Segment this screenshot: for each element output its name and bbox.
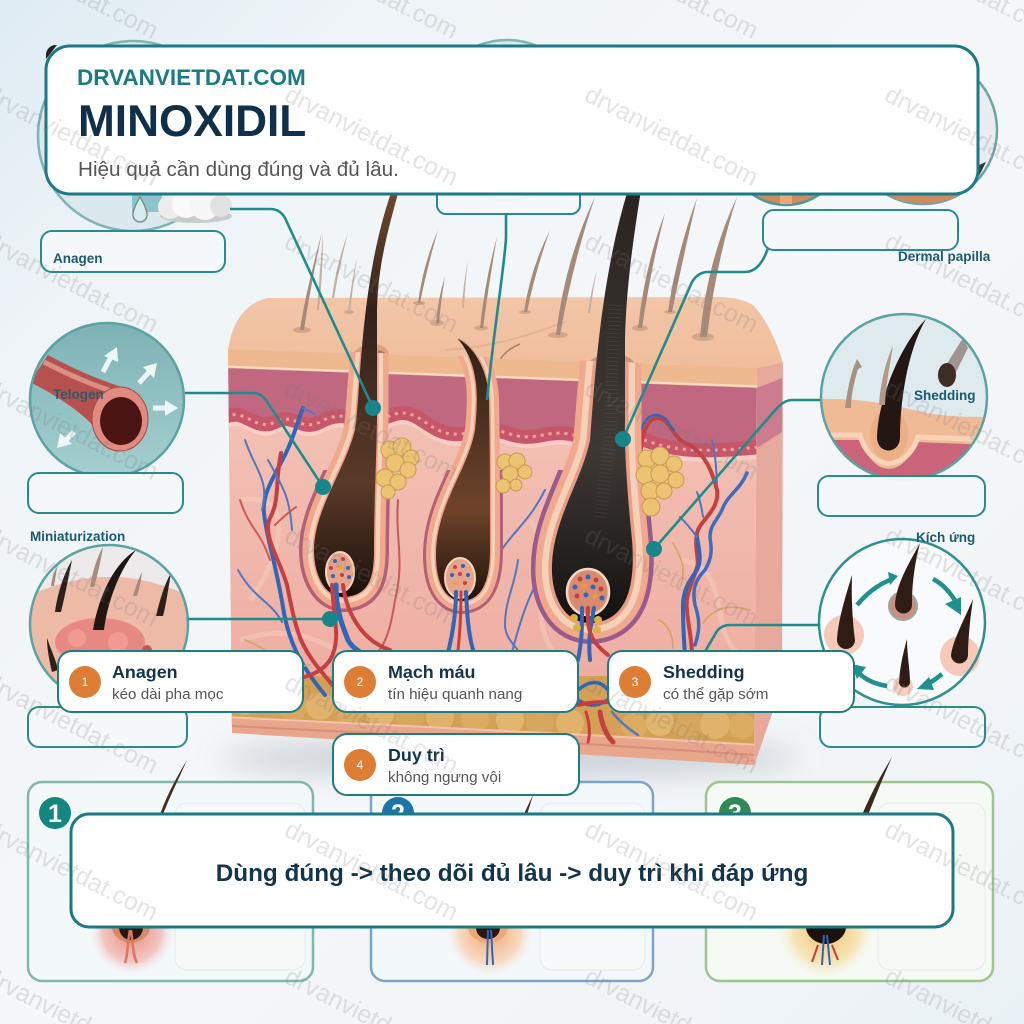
watermarks: drvanvietdat.com [280, 668, 463, 780]
panel: stage 2 [371, 782, 653, 981]
fat layer [225, 676, 760, 745]
callout card 2: 2 [357, 675, 364, 689]
watermarks: drvanvietdat.com [280, 815, 463, 927]
watermarks: drvanvietdat.com [280, 374, 463, 486]
callout card 1: Anagen [112, 662, 178, 682]
inset: vessel dilation (Telogen) [30, 323, 184, 477]
footer banner: Dùng đúng -> theo dõi đủ lâu -> duy trì khi đáp ứng [216, 860, 808, 887]
inset: shedding [820, 312, 988, 475]
blood vessels [238, 408, 750, 700]
callout card 2 [333, 651, 578, 712]
inset: scalp pustules (Miniaturization) [28, 544, 190, 685]
panel: stage 1: 1 [48, 800, 62, 828]
watermarks: drvanvietdat.com [580, 815, 763, 927]
site name: DRVANVIETDAT.COM [77, 65, 306, 90]
skin cross-section block [220, 190, 800, 778]
label: Kích ứng: Kích ứng [916, 530, 975, 545]
dermal papillae [326, 552, 609, 615]
watermarks: drvanvietdat.com [580, 374, 763, 486]
follicle 3 walls [535, 360, 650, 640]
follicle 2 outer sheath [423, 470, 503, 614]
callout card 1 [58, 651, 303, 712]
watermarks: drvanvietdat.com [580, 668, 763, 780]
label: Miniaturization: Miniaturization [30, 529, 125, 544]
panel: stage 1 [28, 760, 313, 981]
header panel [46, 46, 978, 194]
icon: droplet and cotton [133, 190, 232, 223]
top surface [228, 297, 783, 370]
watermarks: drvanvietdat.com [580, 521, 763, 633]
callout card 1: 1 [82, 675, 89, 689]
right side face [754, 363, 783, 766]
watermarks: drvanvietdat.com [280, 521, 463, 633]
callout card 2: tín hiệu quanh nang [388, 686, 522, 703]
callout card 2: Mạch máu [388, 662, 476, 682]
inset: hair cycle (Kích ứng) [819, 539, 985, 705]
label: Shedding: Shedding [914, 388, 976, 403]
bottom strip [232, 718, 754, 765]
callout card 3: có thể gặp sớm [663, 686, 768, 703]
watermarks: drvanvietdat.com [580, 80, 763, 192]
callout card 4: 4 [357, 758, 364, 772]
top-left inset circle [36, 40, 176, 230]
leader lines and dots [185, 209, 820, 655]
panel: stage 3: 3 [728, 800, 742, 828]
follicle 2 walls [436, 339, 490, 601]
hair shafts [552, 190, 641, 623]
follicle 1 walls [302, 352, 388, 608]
follicle 1 outer sheath [299, 470, 390, 612]
callout card 4 [333, 734, 579, 795]
top-right inset circle B [849, 56, 997, 204]
callout card 4: không ngưng vội [388, 769, 501, 786]
watermarks: drvanvietdat.com [280, 80, 463, 192]
follicle 3 outer sheath [530, 470, 654, 644]
title: MINOXIDIL [78, 97, 306, 146]
label: Telogen: Telogen [53, 387, 104, 402]
callout card 3: 3 [632, 675, 639, 689]
top-center inset circle [427, 40, 587, 200]
footer banner [71, 814, 953, 927]
front face layers [225, 349, 760, 770]
label: Anagen: Anagen [53, 251, 103, 266]
small hairs on top surface [293, 197, 737, 341]
top-right inset circle A [728, 89, 844, 205]
panel: stage 3 [706, 757, 993, 981]
panel: stage 2: 2 [391, 800, 405, 828]
subtitle: Hiệu quả cần dùng đúng và đủ lâu. [78, 158, 399, 181]
follicle openings on top surface [349, 322, 643, 422]
label: Dermal papilla: Dermal papilla [898, 249, 991, 264]
callout card 3 [608, 651, 854, 712]
callout card 3: Shedding [663, 662, 744, 682]
callout card 1: kéo dài pha mọc [112, 686, 224, 703]
sebaceous glands [376, 438, 684, 516]
papilla vessel stems [280, 585, 638, 742]
callout card 4: Duy trì [388, 745, 445, 765]
watermarks: drvanvietdat.com [280, 227, 463, 339]
empty label boxes [28, 185, 985, 747]
hair striations [600, 305, 615, 520]
watermarks: drvanvietdat.com [580, 227, 763, 339]
